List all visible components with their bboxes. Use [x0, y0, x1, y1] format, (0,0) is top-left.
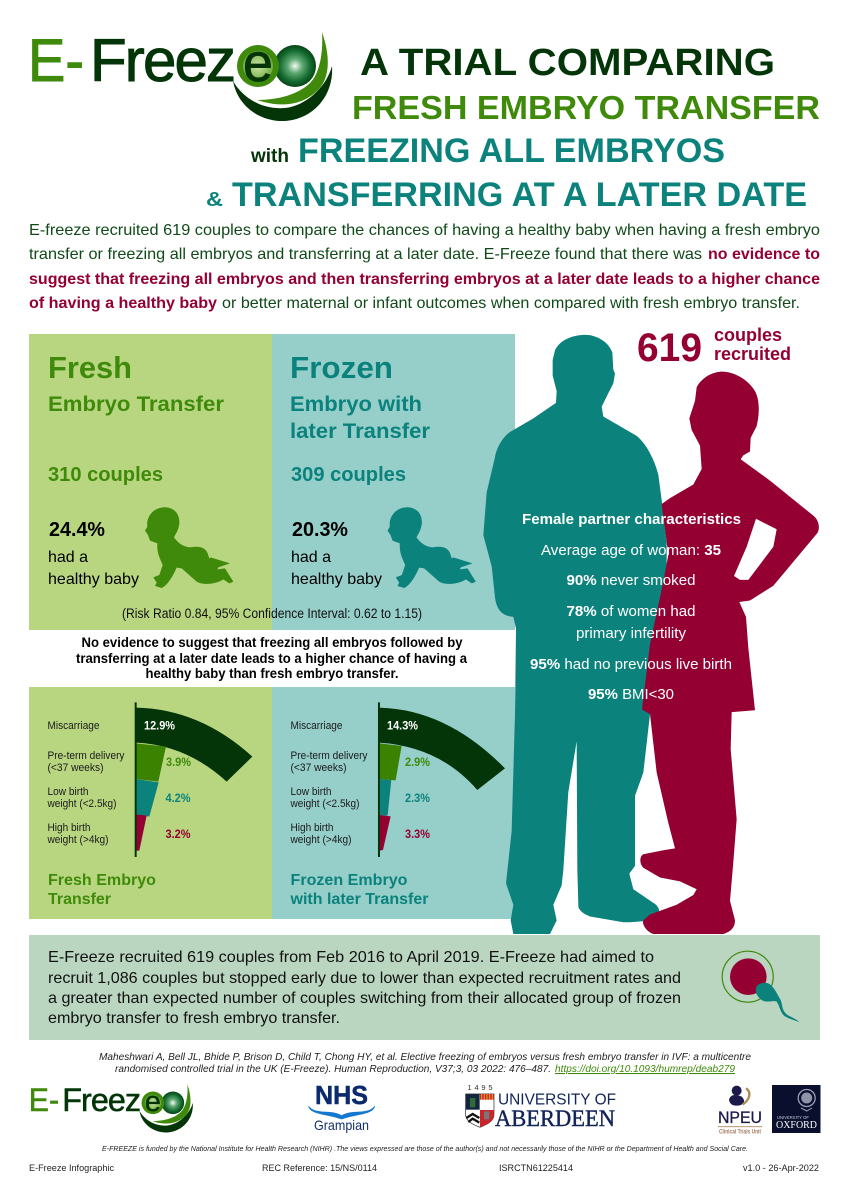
- logo: NPEU: Clinical Trials Unit: [719, 1129, 761, 1135]
- logo: E-Freeze small: E-: [29, 1082, 59, 1118]
- outcome labels: [290, 720, 368, 846]
- heading: frozen: Frozen: [290, 350, 393, 385]
- outcome labels: weight (>4kg): [290, 834, 352, 846]
- intro paragraph: of having a healthy baby: [29, 295, 217, 312]
- footer references: v1.0 - 26-Apr-2022: [743, 1163, 819, 1174]
- panel: fresh embryo transfer result: [29, 334, 272, 630]
- outcome values: 3.9%: [166, 755, 191, 769]
- chart: frozen radial bars: [378, 702, 505, 857]
- subheading: embryo with later transfer: Embryo with: [290, 393, 422, 416]
- title: A TRIAL COMPARING: [360, 42, 775, 84]
- female partner characteristics: Female partner characteristics: [522, 512, 741, 528]
- outcome labels: Miscarriage: [48, 720, 100, 732]
- intro paragraph: E-freeze recruited 619 couples to compare the chances of having a healthy baby when having a fresh embryo: [29, 222, 820, 239]
- logo: E-Freeze: E-: [28, 27, 84, 94]
- logo: E-Freeze small: [29, 1082, 193, 1133]
- percentage: frozen healthy baby: had a: [291, 549, 331, 566]
- outcome values: [144, 718, 191, 841]
- outcome labels: weight (<2.5kg): [290, 798, 360, 810]
- icon: egg and sperm: [722, 951, 799, 1022]
- logo: University of Oxford: UNIVERSITY OF: [777, 1115, 809, 1120]
- subheading: embryo with later transfer: later Transfer: [290, 420, 430, 443]
- percentage: fresh healthy baby: 24.4%: [49, 519, 105, 541]
- citation: https://doi.org/10.1093/humrep/deab279: [555, 1063, 735, 1075]
- logo: University of Aberdeen: [466, 1083, 616, 1131]
- logo: University of Oxford: [772, 1085, 820, 1133]
- heading: fresh: Fresh: [48, 350, 132, 385]
- logo: E-Freeze small: e: [145, 1086, 161, 1118]
- logo: NPEU: [718, 1086, 762, 1135]
- logo: NPEU: NPEU: [718, 1108, 762, 1127]
- title: [206, 42, 820, 214]
- title: FRESH EMBRYO TRANSFER: [352, 89, 820, 126]
- recruitment text: [48, 949, 681, 1027]
- female partner characteristics: primary infertility: [576, 626, 687, 642]
- female partner characteristics: 95% had no previous live birth: [530, 657, 732, 673]
- title: &: [206, 189, 223, 211]
- logo: E-Freeze small: Freez: [62, 1082, 141, 1118]
- conclusion statement: healthy baby than fresh embryo transfer.: [146, 665, 398, 681]
- outcome labels: (<37 weeks): [48, 762, 104, 774]
- outcome values: 2.9%: [405, 755, 430, 769]
- outcome values: 2.3%: [405, 791, 430, 805]
- conclusion statement: transferring at a later date leads to a higher chance of having a: [76, 650, 467, 666]
- footer references: REC Reference: 15/NS/0114: [262, 1163, 377, 1174]
- logo: NHS Grampian: Grampian: [314, 1117, 369, 1133]
- intro paragraph: transfer or freezing all embryos and transferring at a later date. E-Freeze found that there was: [29, 246, 702, 263]
- chart caption: frozen: Frozen Embryo: [290, 872, 408, 889]
- chart caption: frozen: [289, 872, 428, 908]
- citation: [99, 1051, 751, 1075]
- logo: University of Aberdeen: ABERDEEN: [495, 1106, 615, 1131]
- silhouette: man: [483, 335, 667, 934]
- citation: randomised controlled trial in the UK (E-Freeze). Human Reproduction, V37;3, 03 2022: 476–487.: [115, 1063, 551, 1075]
- outcome values: [387, 718, 430, 841]
- outcome labels: Miscarriage: [290, 720, 342, 732]
- recruitment text: embryo transfer to fresh embryo transfer.: [48, 1010, 340, 1027]
- logo: University of Oxford: OXFORD: [776, 1120, 817, 1131]
- logo: University of Aberdeen: UNIVERSITY OF: [498, 1092, 616, 1108]
- logo: University of Aberdeen: 1495: [468, 1083, 492, 1092]
- outcome values: 14.3%: [387, 718, 418, 732]
- intro paragraph: suggest that freezing all embryos and then transferring embryos at a later date leads to a higher chance: [29, 271, 820, 288]
- outcome labels: [47, 720, 125, 846]
- couples count: frozen: 309 couples: [291, 464, 406, 486]
- chart caption: fresh: Transfer: [48, 891, 111, 908]
- logo: NHS Grampian: [308, 1080, 375, 1133]
- footer references: ISRCTN61225414: [499, 1163, 573, 1174]
- intro paragraph: or better maternal or infant outcomes when compared with fresh embryo transfer.: [222, 295, 800, 312]
- outcome labels: High birth: [290, 822, 334, 834]
- outcome labels: weight (<2.5kg): [47, 798, 116, 810]
- conclusion statement: No evidence to suggest that freezing all embryos followed by: [82, 634, 463, 650]
- citation: Maheshwari A, Bell JL, Bhide P, Brison D, Child T, Chong HY, et al. Elective freezing of embryos versus fresh embryo transfer in IVF: a multicentre: [99, 1051, 751, 1063]
- chart caption: frozen: with later Transfer: [289, 891, 428, 908]
- title: with: [250, 146, 289, 167]
- percentage: fresh healthy baby: healthy baby: [48, 571, 139, 588]
- outcome values: 4.2%: [166, 791, 191, 805]
- risk ratio note: (Risk Ratio 0.84, 95% Confidence Interval: 0.62 to 1.15): [122, 606, 422, 621]
- couples recruited: 619: [637, 326, 702, 370]
- couples count: fresh: 310 couples: [48, 464, 163, 486]
- logo: NHS Grampian: NHS: [315, 1080, 368, 1110]
- recruitment text: E-Freeze recruited 619 couples from Feb 2016 to April 2019. E-Freeze had aimed to: [48, 949, 654, 966]
- panel: frozen embryo transfer result: [272, 334, 515, 630]
- couples recruited: [637, 325, 791, 370]
- silhouette: woman: [640, 372, 819, 934]
- percentage: frozen healthy baby: [291, 519, 382, 588]
- subheading: embryo with later transfer: [290, 393, 430, 443]
- chart caption: fresh: Fresh Embryo: [48, 872, 156, 889]
- female partner characteristics: 95% BMI<30: [588, 687, 674, 703]
- recruitment text: a greater than expected number of couples switching from their allocated group of frozen: [48, 990, 681, 1007]
- logo: E-Freeze: Freez: [90, 27, 236, 94]
- outcome labels: weight (>4kg): [47, 834, 108, 846]
- female partner characteristics: Average age of woman: 35: [541, 543, 721, 559]
- outcome labels: (<37 weeks): [290, 762, 346, 774]
- outcome labels: High birth: [48, 822, 90, 834]
- recruitment text: recruit 1,086 couples but stopped early due to lower than expected recruitment rates and: [48, 970, 681, 987]
- panel: frozen outcomes chart: [272, 687, 515, 919]
- panel: recruitment summary: [29, 935, 820, 1040]
- icon: crawling baby green: [145, 507, 233, 588]
- title: TRANSFERRING AT A LATER DATE: [232, 176, 807, 214]
- title: FREEZING ALL EMBRYOS: [298, 132, 725, 170]
- outcome values: 12.9%: [144, 718, 175, 732]
- female partner characteristics: 90% never smoked: [566, 573, 696, 589]
- couples recruited: recruited: [714, 344, 791, 364]
- logo: E-Freeze: e: [243, 33, 273, 93]
- subheading: embryo transfer: Embryo Transfer: [48, 393, 224, 416]
- couples recruited: couples: [714, 325, 782, 345]
- funding statement: E-FREEZE is funded by the National Institute for Health Research (NIHR) .The views expressed are those of the author(s) and not necessarily those of the NIHR or the Department of Health and Social Care.: [102, 1144, 748, 1153]
- percentage: fresh healthy baby: had a: [48, 549, 88, 566]
- logo: E-Freeze: [28, 27, 332, 121]
- footer references: [29, 1163, 819, 1174]
- female partner characteristics: [522, 512, 741, 703]
- conclusion statement: [76, 634, 467, 681]
- outcome labels: Low birth: [48, 786, 88, 798]
- percentage: fresh healthy baby: [48, 519, 139, 588]
- icon: crawling baby teal: [387, 507, 476, 588]
- percentage: frozen healthy baby: healthy baby: [291, 571, 382, 588]
- chart caption: fresh: [48, 872, 156, 908]
- intro paragraph: [29, 222, 820, 312]
- intro paragraph: no evidence to: [708, 246, 820, 263]
- footer references: E-Freeze Infographic: [29, 1163, 114, 1174]
- percentage: frozen healthy baby: 20.3%: [292, 519, 348, 541]
- female partner characteristics: 78% of women had: [566, 604, 696, 620]
- outcome values: 3.2%: [166, 827, 191, 841]
- outcome labels: Pre-term delivery: [290, 750, 368, 762]
- chart: fresh radial bars: [135, 702, 252, 857]
- outcome values: 3.3%: [405, 827, 430, 841]
- panel: fresh outcomes chart: [29, 687, 272, 919]
- outcome labels: Low birth: [290, 786, 332, 798]
- outcome labels: Pre-term delivery: [48, 750, 125, 762]
